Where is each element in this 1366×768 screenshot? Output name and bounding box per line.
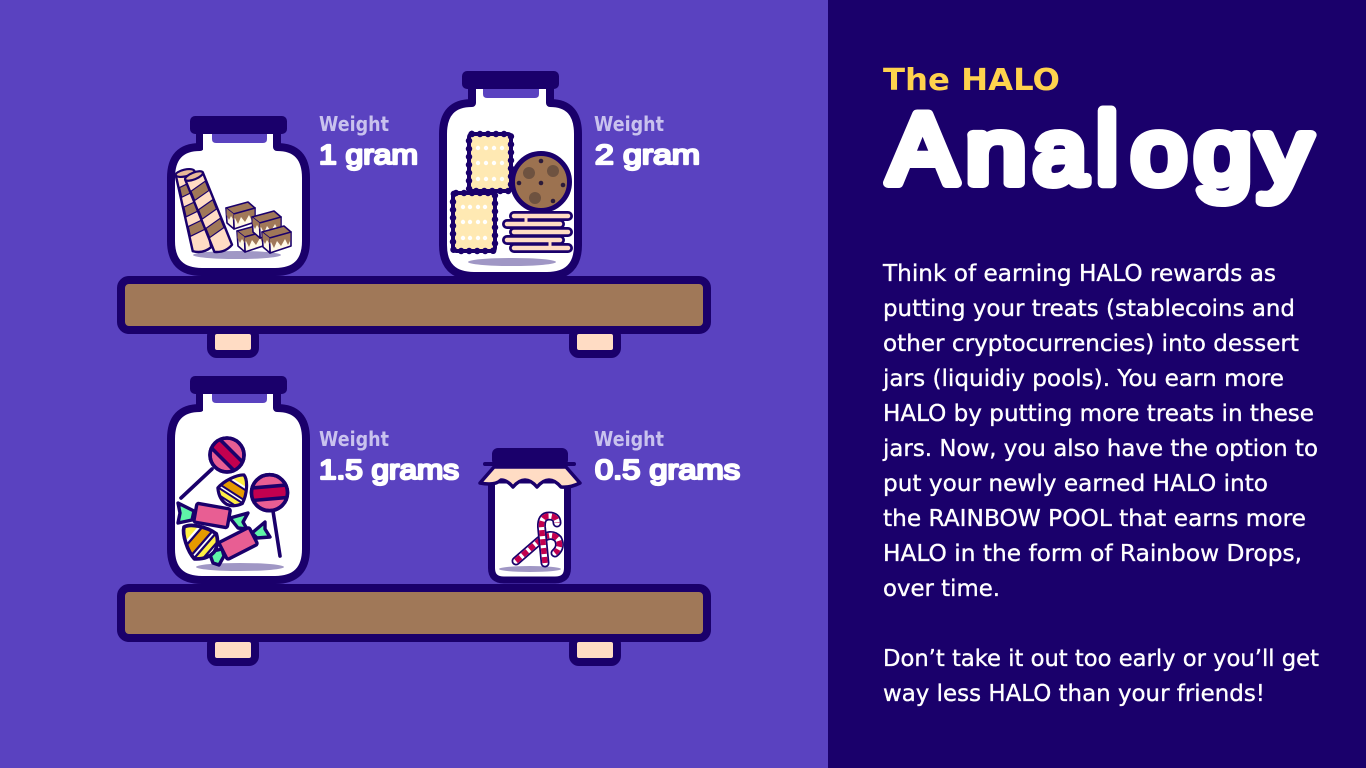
heading: Analogy: A <box>888 93 957 204</box>
weight label: 2 gram <box>594 112 700 170</box>
bottom shelf board <box>121 588 707 638</box>
weight label: 1.5 grams: 1.5 grams <box>319 454 459 485</box>
body paragraph: other cryptocurrencies) into dessert <box>883 329 1299 357</box>
lollipop left <box>181 435 247 498</box>
left background panel <box>0 0 828 768</box>
jar 2: crackers, cookie and biscuits <box>443 71 578 276</box>
body paragraph: jars. Now, you also have the option to <box>882 434 1318 462</box>
cube top left <box>226 202 255 229</box>
weight label: 2 gram: Weight <box>594 112 664 136</box>
jar 4 lid rim <box>483 462 576 466</box>
cookie <box>512 154 570 210</box>
jar 1 shadow <box>193 251 281 259</box>
wrapped candy lower <box>209 522 270 565</box>
top shelf right peg <box>573 330 617 354</box>
heading: Analogy: o <box>1132 102 1186 203</box>
jar 3 shadow <box>196 563 284 571</box>
candy cane back <box>516 535 559 561</box>
heading: Analogy: y <box>1258 102 1312 203</box>
weight label: 1 gram: Weight <box>319 112 389 136</box>
cube back <box>237 225 266 252</box>
body paragraph: jars (liquidiy pools). You earn more <box>882 364 1284 392</box>
heading: Analogy: n <box>966 102 1026 203</box>
cracker top <box>469 134 511 191</box>
weight label: 2 gram: 2 gram <box>595 139 700 170</box>
heading: The HALO: The HALO <box>883 63 1060 98</box>
biscuit stack <box>507 216 568 248</box>
wrapped candy middle <box>178 503 248 529</box>
jar 4 shadow <box>499 566 561 572</box>
cracker bottom <box>453 193 495 251</box>
closing paragraph <box>883 644 1319 707</box>
jar 1 body and lid <box>171 116 306 272</box>
jar 4 body <box>492 480 568 580</box>
heading: Analogy: g <box>1194 102 1252 203</box>
body paragraph <box>882 259 1318 602</box>
weight label: 1.5 grams <box>319 427 459 485</box>
jar 2 body and lid <box>443 71 578 276</box>
body paragraph: HALO in the form of Rainbow Drops, <box>883 539 1302 567</box>
jar 4 lid <box>492 448 568 466</box>
top shelf left peg <box>211 330 255 354</box>
weight label: 1 gram <box>319 112 418 170</box>
candy cane front <box>541 516 557 563</box>
weight label: 0.5 grams: Weight <box>594 427 664 451</box>
jar 2 shadow <box>468 258 556 266</box>
jar 4: candy canes <box>480 448 580 580</box>
weight label: 1.5 grams: Weight <box>319 427 389 451</box>
wafer roll right <box>184 169 233 254</box>
weight label: 0.5 grams: 0.5 grams <box>595 454 740 485</box>
body paragraph: HALO by putting more treats in these <box>883 399 1314 427</box>
jar 1: wafers and cubes <box>171 116 306 272</box>
body paragraph: Think of earning HALO rewards as <box>882 259 1276 287</box>
closing paragraph: way less HALO than your friends! <box>883 679 1265 707</box>
right text panel <box>828 0 1366 768</box>
bottom shelf right peg <box>573 638 617 662</box>
cube middle <box>252 211 281 238</box>
bottom shelf left peg <box>211 638 255 662</box>
closing paragraph: Don’t take it out too early or you’ll get <box>883 644 1319 672</box>
wafer roll left <box>175 168 212 254</box>
body paragraph: over time. <box>883 574 1000 602</box>
candy corn bottom <box>169 510 227 568</box>
top shelf board <box>121 280 707 330</box>
body paragraph: putting your treats (stablecoins and <box>883 294 1295 322</box>
candy corn top <box>210 464 260 513</box>
jar 3 body and lid <box>171 376 306 580</box>
jar 3: lollipops and candies <box>169 376 306 580</box>
top shelf <box>121 280 707 354</box>
weight label: 1 gram: 1 gram <box>319 139 418 170</box>
weight label: 0.5 grams <box>594 427 740 485</box>
heading: Analogy: a <box>1034 102 1087 203</box>
lollipop right <box>247 475 292 556</box>
bottom shelf <box>121 588 707 662</box>
body paragraph: put your newly earned HALO into <box>883 469 1268 497</box>
jar 4 cloth cover <box>480 467 580 487</box>
heading: Analogy: l <box>1096 93 1118 205</box>
cube right <box>262 226 291 253</box>
body paragraph: the RAINBOW POOL that earns more <box>883 504 1306 532</box>
